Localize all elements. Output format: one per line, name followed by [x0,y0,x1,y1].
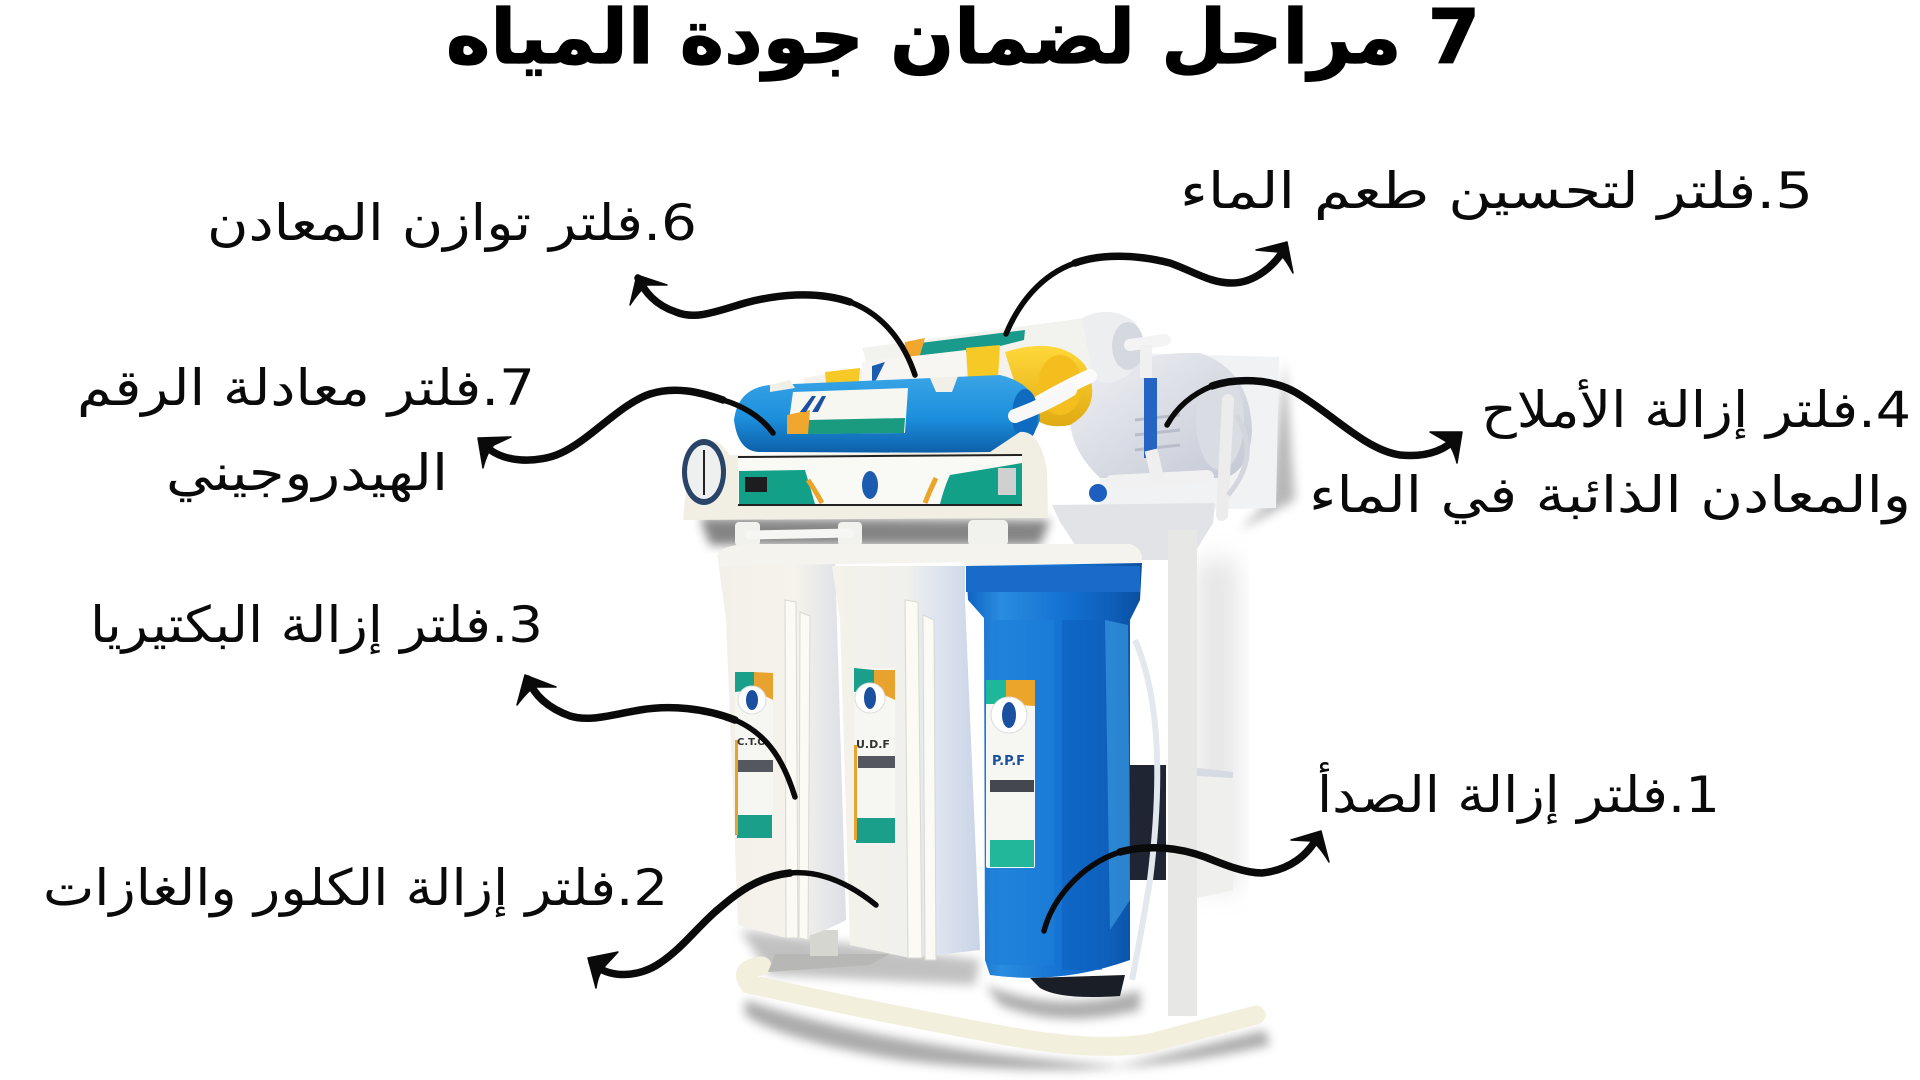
machine shadows [700,360,1295,1070]
arrow 7 [478,390,773,468]
housing: left white C.T.O [718,560,846,940]
housing: middle white U.D.F [832,566,980,960]
arrow 6 [630,275,915,375]
blue transparent housing [966,563,1142,997]
black bottom cap [1030,975,1125,997]
label 3: 3.فلتر إزالة البكتيريا [90,596,543,655]
middle filter label: U.D.F [856,738,890,751]
arrow 5 [1006,242,1293,334]
blue filter label: P.P.F [992,754,1025,769]
water filter machine illustration [478,242,1462,1070]
label 4 [1309,379,1911,525]
blue tube [1144,378,1157,458]
wall bracket plate [1100,352,1279,512]
blue filter label [986,680,1035,868]
upright pole [1168,530,1197,1016]
arrow 4 [1167,381,1462,463]
label 7 [77,359,535,503]
pump [1070,353,1252,515]
label 4: 4.فلتر إزالة الأملاح [1481,379,1911,440]
label 5: 5.فلتر لتحسين طعم الماء [1180,162,1813,220]
left filter label [735,672,773,838]
pressure gauge [682,439,726,505]
dark mounting plate [1130,765,1166,880]
left filter label: C.T.O [737,737,766,748]
middle filter label [854,668,895,843]
yellow cylinder [803,345,1092,435]
label 2: 2.فلتر إزالة الكلور والغازات [43,859,668,918]
label 7: الهيدروجيني [166,444,448,503]
label 1: 1.فلتر إزالة الصدأ [1317,762,1720,825]
blue cylinder label [787,388,908,434]
arrow 2 [588,873,876,988]
blue carbon cylinder [734,375,1070,453]
label 7: 7.فلتر معادلة الرقم [77,359,535,417]
control panel [683,432,1048,520]
arrow 1 [1044,831,1329,931]
support shelf and tubing [1052,450,1215,560]
filter head caps and connectors [717,520,1142,566]
label 6: 6.فلتر توازن المعادن [207,194,697,252]
rear white membrane cylinder [862,312,1165,405]
white water tube [1132,640,1157,980]
small side box [1197,768,1233,898]
label 4: والمعادن الذائبة في الماء [1309,466,1911,525]
base stand [746,930,1256,1046]
arrow 3 [517,675,795,797]
